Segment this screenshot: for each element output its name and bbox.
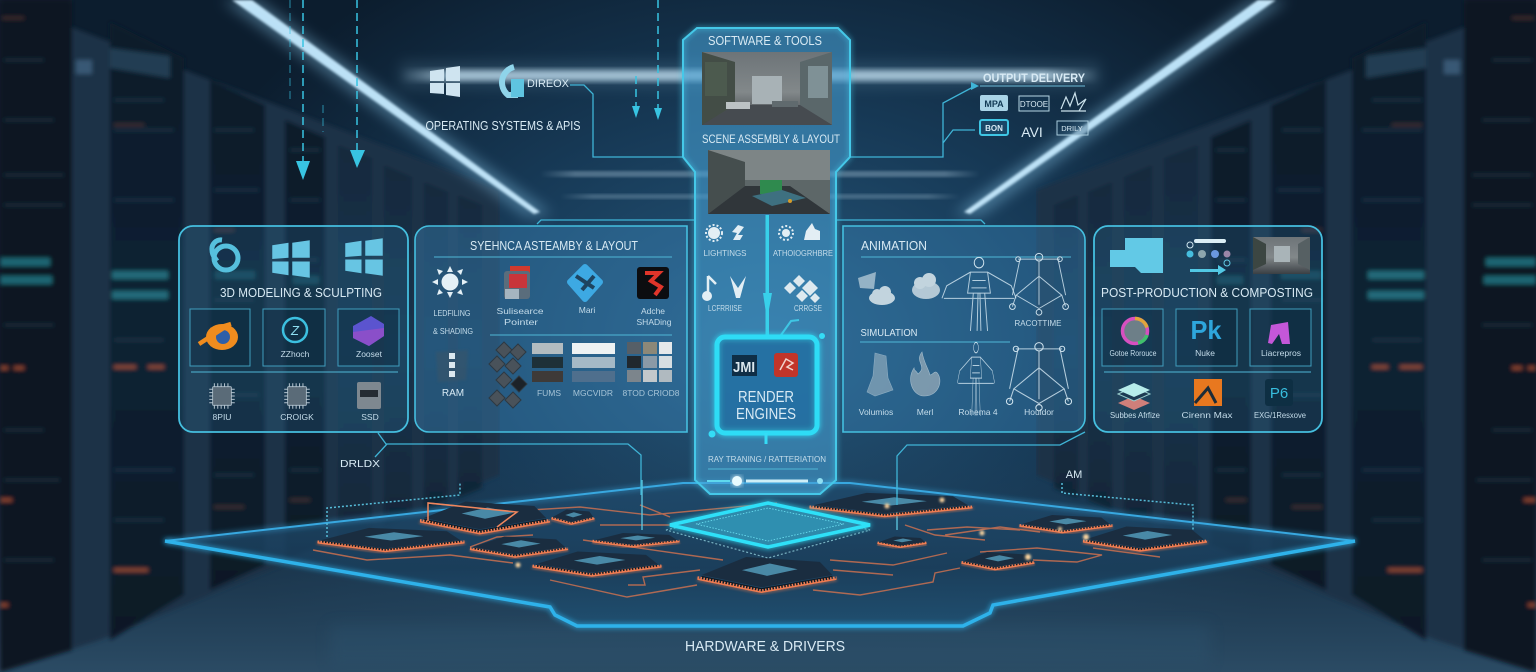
logo: engine one: JMI <box>733 359 755 376</box>
label: chipset: CROIGK <box>280 412 314 422</box>
icon: composite <box>1110 238 1163 273</box>
label: painter: Pointer <box>504 317 538 327</box>
panel: scene assembly and layout <box>415 226 687 432</box>
icon: DirectX <box>502 67 524 97</box>
panel: animation and simulation <box>843 226 1085 432</box>
icon: Adobe <box>637 267 669 299</box>
tool: ZBrush: Z <box>290 323 300 338</box>
tool: Nuke <box>1176 309 1237 366</box>
icon: rig <box>1010 253 1068 315</box>
central processor <box>666 503 870 558</box>
heading: output delivery: OUTPUT DELIVERY <box>983 71 1085 85</box>
icon group: atmosphere <box>779 223 820 240</box>
label: Rohema: Rohema 4 <box>958 407 998 417</box>
tool: Blender <box>190 309 250 366</box>
heading: SYEHNCA ASTEAMBY & LAYOUT <box>470 239 638 253</box>
label: Houdini: Houldor <box>1024 407 1054 417</box>
label: driver right: AM <box>1066 469 1082 481</box>
format: BON: BON <box>985 124 1003 133</box>
icon: SSD <box>357 382 381 409</box>
icon: layers <box>1118 383 1150 410</box>
icon: waveform <box>1061 93 1086 111</box>
icon: sun <box>432 266 468 298</box>
ceiling lights <box>222 0 1288 216</box>
icon: skeleton <box>942 257 1016 331</box>
heading: POST-PRODUCTION & COMPOSTING <box>1101 285 1313 300</box>
chips <box>318 528 464 552</box>
label: Adobe: Adche <box>641 306 665 316</box>
icon group: diamonds <box>784 275 820 303</box>
icon: Photoshop <box>1265 379 1293 406</box>
cyan risers <box>642 480 897 530</box>
glow dots <box>516 498 1089 568</box>
heading: software and tools: SOFTWARE & TOOLS <box>708 33 822 48</box>
label: SSD: SSD <box>361 412 379 422</box>
icon: Cinema <box>1194 379 1222 406</box>
format: outlined badge: DTOOE <box>1020 100 1048 109</box>
label: EXG: EXG/1Resxove <box>1254 410 1306 420</box>
label: monitor: MGCVIDR <box>573 388 613 398</box>
label: Cinema Max: Cirenn Max <box>1182 410 1233 420</box>
heading: render engines: RENDER <box>738 389 794 406</box>
label: ray tracing and rasterization: RAY TRANING / RATTERIATION <box>708 454 826 464</box>
tool: color grading <box>1102 309 1163 366</box>
server racks right <box>1036 0 1536 672</box>
icon: windows logo <box>430 66 460 97</box>
heading: 3D MODELING & SCULPTING <box>220 285 382 300</box>
icon: flame <box>911 352 940 396</box>
icon: RAM <box>436 350 468 382</box>
heading: engines: ENGINES <box>736 406 796 423</box>
heading: scene assembly: SCENE ASSEMBLY & LAYOUT <box>702 132 841 146</box>
tool: Zooset <box>338 309 399 366</box>
heading: operating systems: OPERATING SYSTEMS & APIS <box>426 118 581 133</box>
label: lightings: LIGHTINGS <box>704 248 747 258</box>
format: outlined badge 2: DRILY <box>1061 124 1083 133</box>
format: MPA: MPA <box>984 99 1004 109</box>
tool: Nuke: Pk <box>1190 315 1222 345</box>
label: after effects: Subbes Afrfize <box>1110 410 1160 420</box>
format: AVI: AVI <box>1021 124 1043 140</box>
label: stone cross: 8TOD CRIOD8 <box>622 388 680 398</box>
image: scene viewport <box>708 150 830 214</box>
dotted leaders <box>327 482 1193 537</box>
panel: output delivery <box>980 71 1088 140</box>
icon: Mari <box>570 267 600 299</box>
render engines box <box>708 320 825 444</box>
icon: cloth <box>867 353 893 396</box>
icon: windows one <box>272 240 310 278</box>
label: lighting: LEDFILING <box>434 308 470 318</box>
hardware platform <box>165 480 1355 626</box>
image: living room render <box>702 52 832 125</box>
label: volumes: Volumios <box>859 407 893 417</box>
tool: Lightroom <box>1250 309 1311 366</box>
label: rig: RACOTTIME <box>1014 318 1062 328</box>
label: shading: & SHADING <box>433 326 473 336</box>
server racks left <box>0 0 500 672</box>
tool: ZBrush: ZZhoch <box>281 349 310 359</box>
icon: substance <box>504 266 530 299</box>
icon: chipset <box>284 383 310 409</box>
heading: simulation: SIMULATION <box>860 327 918 339</box>
icon: windows two <box>345 238 383 276</box>
label: DirectX: DIREOX <box>527 78 570 90</box>
label: driver left: DRLDX <box>340 458 380 470</box>
label: lcfrriise: LCFRRIISE <box>708 303 742 313</box>
heading: animation: ANIMATION <box>861 239 927 253</box>
circuit traces <box>313 503 1160 597</box>
icon: skeleton simulation <box>957 342 995 416</box>
label: shading: SHADing <box>637 317 672 327</box>
label: Mari: Mari <box>579 305 595 315</box>
label: Mari: Merl <box>917 407 933 417</box>
material swatches: column one <box>532 343 563 382</box>
label: RAM: RAM <box>442 388 464 399</box>
icon group: music and butterfly <box>702 276 746 301</box>
panel: software and tools central column <box>683 28 850 494</box>
icon group: lighting <box>706 225 744 241</box>
material swatches: column two <box>572 343 615 382</box>
icon: link <box>212 240 238 270</box>
label: fums: FUMS <box>537 388 561 398</box>
panel: 3D modeling and sculpting <box>179 226 408 432</box>
label: charge: CRRGSE <box>794 303 822 313</box>
tool: Lightroom: Liacrepros <box>1261 348 1301 358</box>
label: atmosphere: ATHOIOGRHBRE <box>773 248 833 258</box>
logo: engine two <box>774 353 798 377</box>
icon: rig simulation <box>1006 343 1072 411</box>
image: interior render <box>1253 237 1310 274</box>
slider <box>707 476 823 486</box>
label: substance painter: Sulisearce <box>496 306 544 316</box>
material swatches: diamonds <box>489 342 527 408</box>
connector lines <box>375 85 1085 505</box>
icon: clouds <box>858 272 940 305</box>
tool: Nuke: Nuke <box>1195 348 1215 358</box>
panel: operating systems and APIs <box>426 66 581 133</box>
tool: Zooset: Zooset <box>356 349 383 359</box>
tool: color grading: Gotoe Rorouce <box>1110 348 1157 358</box>
panel: post-production and compositing <box>1094 226 1322 432</box>
icon: Photoshop: P6 <box>1270 385 1288 402</box>
dashed arrows from above <box>290 0 662 180</box>
label: CPU: 8PIU <box>213 412 231 422</box>
tool: ZBrush <box>263 309 325 366</box>
icon: nodes <box>1186 239 1230 275</box>
material swatches: grid <box>627 342 672 382</box>
arrow: pipeline flow <box>763 215 772 335</box>
icon: CPU <box>209 383 235 409</box>
heading: hardware and drivers: HARDWARE & DRIVERS <box>685 638 845 655</box>
